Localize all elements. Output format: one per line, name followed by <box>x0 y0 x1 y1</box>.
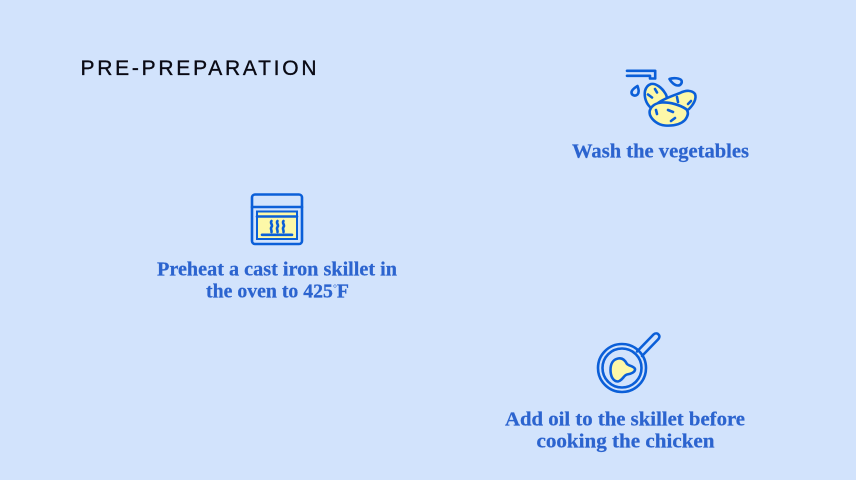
step: preheat skillet <box>157 194 397 302</box>
label: add oil <box>505 408 745 452</box>
icon: oven <box>252 194 302 244</box>
label: add oil: Add oil to the skillet before <box>505 408 745 430</box>
label: preheat skillet: the oven to 425 <box>206 280 334 302</box>
step: add oil <box>505 333 745 452</box>
label: preheat skillet: ° <box>333 284 337 294</box>
label: preheat skillet: F <box>337 280 349 302</box>
icon: skillet with oil <box>598 333 659 392</box>
label: preheat skillet: Preheat a cast iron skillet in <box>157 258 397 280</box>
step: wash the vegetables <box>572 71 749 162</box>
label: wash the vegetables: Wash the vegetables <box>572 140 749 162</box>
icon: faucet and potatoes <box>627 71 696 126</box>
label: preheat skillet <box>157 258 397 302</box>
label: add oil: cooking the chicken <box>536 430 714 452</box>
title: PRE-PREPARATION <box>80 57 316 80</box>
